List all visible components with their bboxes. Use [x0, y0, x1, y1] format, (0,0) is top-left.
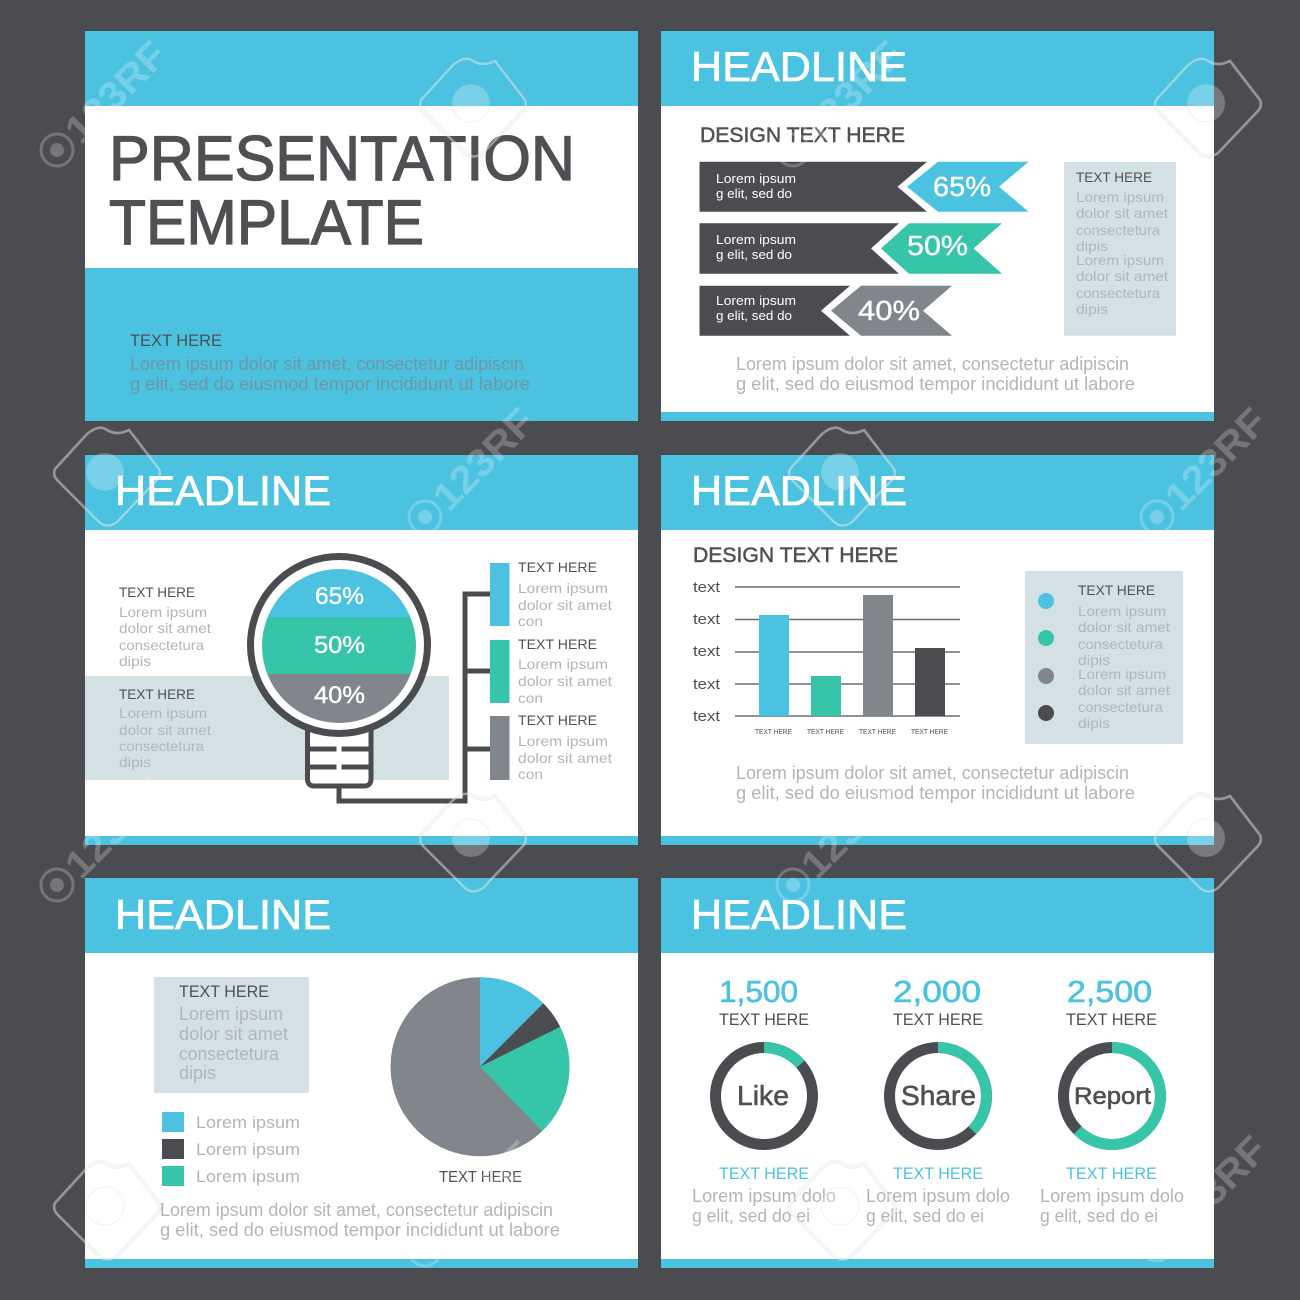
- text block: left top: dolor sit amet: [119, 620, 211, 636]
- item: blue: con: [518, 613, 543, 629]
- watermarks: logo: 123RF: [1157, 400, 1276, 519]
- pie chart: [390, 977, 570, 1156]
- item: grey: con: [518, 766, 543, 782]
- bar chart: TEXT HERE: [859, 729, 896, 736]
- legend: [162, 1112, 300, 1186]
- legend box: consectetura: [1078, 636, 1163, 652]
- text block: footer: g elit, sed do eiusmod tempor incididunt ut labore: [160, 1220, 560, 1240]
- ribbon: 50%: 50%: [907, 230, 968, 261]
- legend: Lorem ipsum: [196, 1140, 300, 1159]
- text block: intro: TEXT HERE: [130, 331, 222, 350]
- text block: intro: [130, 331, 530, 394]
- bar chart: text: [693, 611, 721, 628]
- text block: left bottom: dipis: [119, 754, 151, 770]
- text block: footer: Lorem ipsum dolor sit amet, consectetur adipiscin: [160, 1200, 553, 1220]
- heading: HEADLINE: [115, 891, 331, 938]
- text block: footer: [736, 763, 1135, 803]
- ribbon: 40%: Lorem ipsum: [716, 293, 796, 308]
- ribbon: 50%: [700, 223, 1002, 274]
- panel: ribbon percentages: [661, 31, 1214, 421]
- watermarks: logo: 123RF: [425, 1133, 544, 1252]
- bar chart: text: [693, 643, 721, 660]
- text block: intro: g elit, sed do eiusmod tempor incididunt ut labore: [130, 374, 530, 394]
- stat: like: TEXT HERE: [719, 1164, 809, 1183]
- stat: share: TEXT HERE: [893, 1010, 983, 1029]
- stat: report: Lorem ipsum dolo: [1040, 1186, 1184, 1206]
- title: [109, 124, 575, 258]
- stat: like: TEXT HERE: [719, 1010, 809, 1029]
- watermarks: logo: 123RF: [57, 33, 176, 152]
- item: green: con: [518, 690, 543, 706]
- text block: footer: [736, 354, 1135, 394]
- text block: left bottom: Lorem ipsum: [119, 705, 207, 721]
- icon: light bulb: [250, 556, 428, 786]
- bar chart: TEXT HERE: [755, 729, 792, 736]
- stat: share: g elit, sed do ei: [866, 1206, 984, 1226]
- side text box: dipis: [1076, 301, 1108, 317]
- bar chart: TEXT HERE: [911, 729, 948, 736]
- text block: left top: [119, 584, 211, 669]
- bar chart: text: [693, 579, 721, 596]
- text block: intro: Lorem ipsum dolor sit amet, consectetur adipiscin: [130, 354, 524, 374]
- item: blue: TEXT HERE: [518, 559, 597, 575]
- watermarks: logo: 123RF: [425, 400, 544, 519]
- title: PRESENTATION: [109, 124, 575, 194]
- title: TEMPLATE: [109, 188, 424, 258]
- text block: left bottom: [119, 686, 211, 770]
- item: grey: Lorem ipsum: [518, 733, 608, 749]
- text block: left top: TEXT HERE: [119, 584, 195, 600]
- icon: light bulb: 65%: [315, 583, 364, 610]
- panel: light bulb: [85, 455, 638, 845]
- heading: HEADLINE: [691, 43, 907, 90]
- watermarks: logo: 123RF: [57, 768, 176, 887]
- stat: report: g elit, sed do ei: [1040, 1206, 1158, 1226]
- ribbon: 65%: [700, 162, 1029, 212]
- text block: left top: consectetura: [119, 637, 204, 653]
- item: grey: [490, 712, 612, 782]
- side text box: Lorem ipsum: [1076, 189, 1164, 205]
- stat: share: TEXT HERE: [893, 1164, 983, 1183]
- legend box: dipis: [1078, 715, 1110, 731]
- stat: like: g elit, sed do ei: [692, 1206, 810, 1226]
- legend box: [1025, 571, 1183, 744]
- side text box: consectetura: [1076, 285, 1160, 301]
- legend box: Lorem ipsum: [1078, 666, 1166, 682]
- legend: Lorem ipsum: [196, 1167, 300, 1186]
- side text box: Lorem ipsum: [1076, 252, 1164, 268]
- legend: Lorem ipsum: [196, 1113, 300, 1132]
- heading: HEADLINE: [115, 467, 331, 514]
- item: blue: [490, 559, 612, 629]
- text box: Lorem ipsum: [179, 1004, 283, 1024]
- stat: like: [692, 974, 836, 1226]
- panel: title slide: [85, 31, 638, 421]
- watermarks: logo: 123RF: [793, 33, 912, 152]
- stat: report: [1040, 974, 1184, 1226]
- text block: left top: dipis: [119, 653, 151, 669]
- pie label: TEXT HERE: [439, 1169, 522, 1186]
- ribbon: 40%: [700, 286, 952, 336]
- item: blue: dolor sit amet: [518, 597, 612, 613]
- heading: HEADLINE: [691, 467, 907, 514]
- legend box: dolor sit amet: [1078, 619, 1170, 635]
- item: green: dolor sit amet: [518, 673, 612, 689]
- icon: light bulb: 40%: [314, 682, 365, 709]
- side text box: dolor sit amet: [1076, 205, 1168, 221]
- panel: pie chart: [85, 878, 638, 1268]
- connector lines: [339, 594, 490, 801]
- text block: footer: [160, 1200, 560, 1240]
- item: grey: dolor sit amet: [518, 750, 612, 766]
- text block: left bottom: consectetura: [119, 738, 204, 754]
- stat: report: 2,500: [1067, 974, 1152, 1009]
- stat: like: Lorem ipsum dolo: [692, 1186, 836, 1206]
- legend box: consectetura: [1078, 699, 1163, 715]
- side text box: [1064, 162, 1176, 336]
- ribbon: 65%: Lorem ipsum: [716, 171, 796, 186]
- side text box: TEXT HERE: [1076, 169, 1152, 185]
- stat: report: TEXT HERE: [1066, 1010, 1157, 1029]
- item: green: TEXT HERE: [518, 636, 597, 652]
- icon: light bulb: 50%: [314, 632, 365, 659]
- text block: left bottom: TEXT HERE: [119, 686, 195, 702]
- text box: dolor sit amet: [179, 1024, 288, 1044]
- bar chart: text: [693, 708, 721, 725]
- item: green: [490, 636, 612, 706]
- side text box: consectetura: [1076, 222, 1160, 238]
- item: blue: Lorem ipsum: [518, 580, 608, 596]
- stat: share: Share: [901, 1080, 976, 1111]
- text block: footer: Lorem ipsum dolor sit amet, consectetur adipiscin: [736, 354, 1129, 374]
- legend box: Lorem ipsum: [1078, 603, 1166, 619]
- ribbon: 40%: g elit, sed do: [716, 308, 792, 323]
- text block: left bottom: dolor sit amet: [119, 722, 211, 738]
- ribbon: 40%: 40%: [858, 295, 920, 326]
- text box: TEXT HERE: [179, 982, 269, 1001]
- stat: like: 1,500: [719, 974, 798, 1009]
- bar chart: TEXT HERE: [807, 729, 844, 736]
- legend box: dipis: [1078, 652, 1110, 668]
- stat: like: Like: [737, 1080, 789, 1111]
- stat: share: 2,000: [893, 974, 981, 1009]
- side text box: dolor sit amet: [1076, 268, 1168, 284]
- ribbon: 50%: Lorem ipsum: [716, 232, 796, 247]
- text block: left top: Lorem ipsum: [119, 604, 207, 620]
- text box: dipis: [179, 1063, 216, 1083]
- subheading: DESIGN TEXT HERE: [693, 544, 898, 567]
- item: green: Lorem ipsum: [518, 656, 608, 672]
- stat: report: TEXT HERE: [1066, 1164, 1157, 1183]
- text block: footer: g elit, sed do eiusmod tempor incididunt ut labore: [736, 374, 1135, 394]
- grey band: [85, 676, 449, 780]
- panel: ring stats: [661, 878, 1214, 1268]
- subheading: DESIGN TEXT HERE: [700, 124, 905, 147]
- ribbon: 65%: g elit, sed do: [716, 186, 792, 201]
- ribbon: 65%: 65%: [933, 171, 991, 202]
- stat: share: [866, 974, 1010, 1226]
- text box: consectetura: [179, 1044, 280, 1064]
- side text box: dipis: [1076, 238, 1108, 254]
- bar chart: [693, 579, 960, 736]
- text block: footer: Lorem ipsum dolor sit amet, consectetur adipiscin: [736, 763, 1129, 783]
- stat: report: Report: [1074, 1083, 1151, 1110]
- legend box: TEXT HERE: [1078, 582, 1155, 598]
- ribbon: 50%: g elit, sed do: [716, 247, 792, 262]
- legend box: dolor sit amet: [1078, 682, 1170, 698]
- text box: [154, 977, 309, 1093]
- stat: share: Lorem ipsum dolo: [866, 1186, 1010, 1206]
- watermarks: logo: 123RF: [793, 768, 912, 887]
- text block: footer: g elit, sed do eiusmod tempor incididunt ut labore: [736, 783, 1135, 803]
- heading: HEADLINE: [691, 891, 907, 938]
- watermarks: logo: 123RF: [1157, 1128, 1276, 1247]
- bar chart: text: [693, 676, 721, 693]
- item: grey: TEXT HERE: [518, 712, 597, 728]
- panel: bar chart: [661, 455, 1214, 845]
